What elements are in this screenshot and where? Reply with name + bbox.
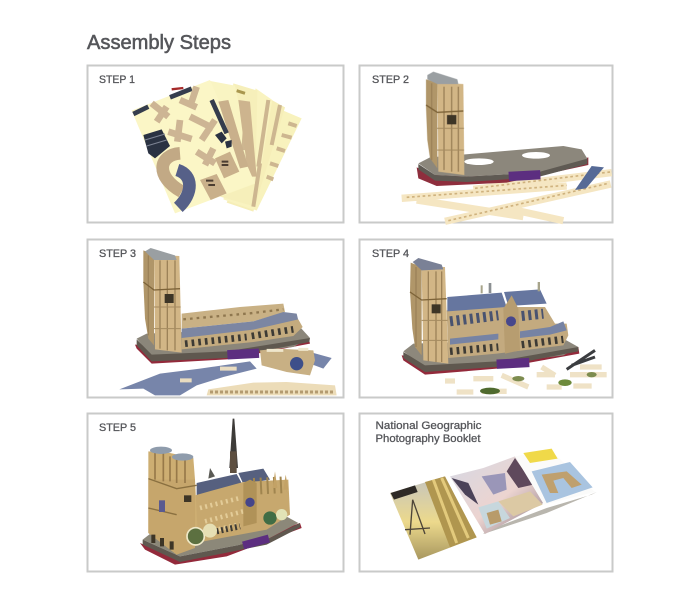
panel: step 3 [88, 240, 344, 398]
image: nave with transept and loose tree parts [402, 258, 607, 394]
image: open booklet and cover [390, 449, 597, 560]
title: Assembly Steps [87, 32, 231, 54]
label: step 3: STEP 3 [99, 248, 136, 260]
label: step 1: STEP 1 [99, 74, 135, 86]
transept front [503, 295, 520, 354]
image: first tower on base [402, 72, 612, 221]
tower [143, 250, 154, 345]
panel: step 1 [88, 66, 344, 222]
nave [182, 304, 285, 329]
panel: step 5 [88, 414, 344, 572]
heading: booklet: National Geographic [376, 420, 482, 432]
image: fanned sheets of puzzle parts [132, 80, 302, 213]
panel: photography booklet [360, 414, 612, 572]
panel: step 2 [360, 66, 612, 222]
base [417, 157, 588, 186]
label: step 5: STEP 5 [99, 422, 136, 434]
nave wall [195, 480, 290, 543]
right page [515, 450, 595, 505]
cover [390, 476, 477, 560]
label: step 4: STEP 4 [372, 248, 409, 260]
panel: step 4 [360, 240, 612, 398]
facade towers [148, 451, 198, 555]
roof [197, 474, 242, 495]
heading: booklet: Photography Booklet [376, 433, 480, 445]
left page [450, 456, 543, 534]
spire [229, 419, 238, 468]
tower [426, 79, 437, 168]
image: tower with nave arcade and loose parts [119, 248, 337, 395]
tower [410, 263, 422, 355]
image: completed cathedral with spire and trees [140, 419, 302, 565]
label: step 2: STEP 2 [372, 74, 409, 86]
loose parts [445, 367, 607, 392]
trees [187, 528, 204, 545]
upper nave [447, 307, 568, 358]
parts [119, 361, 257, 395]
